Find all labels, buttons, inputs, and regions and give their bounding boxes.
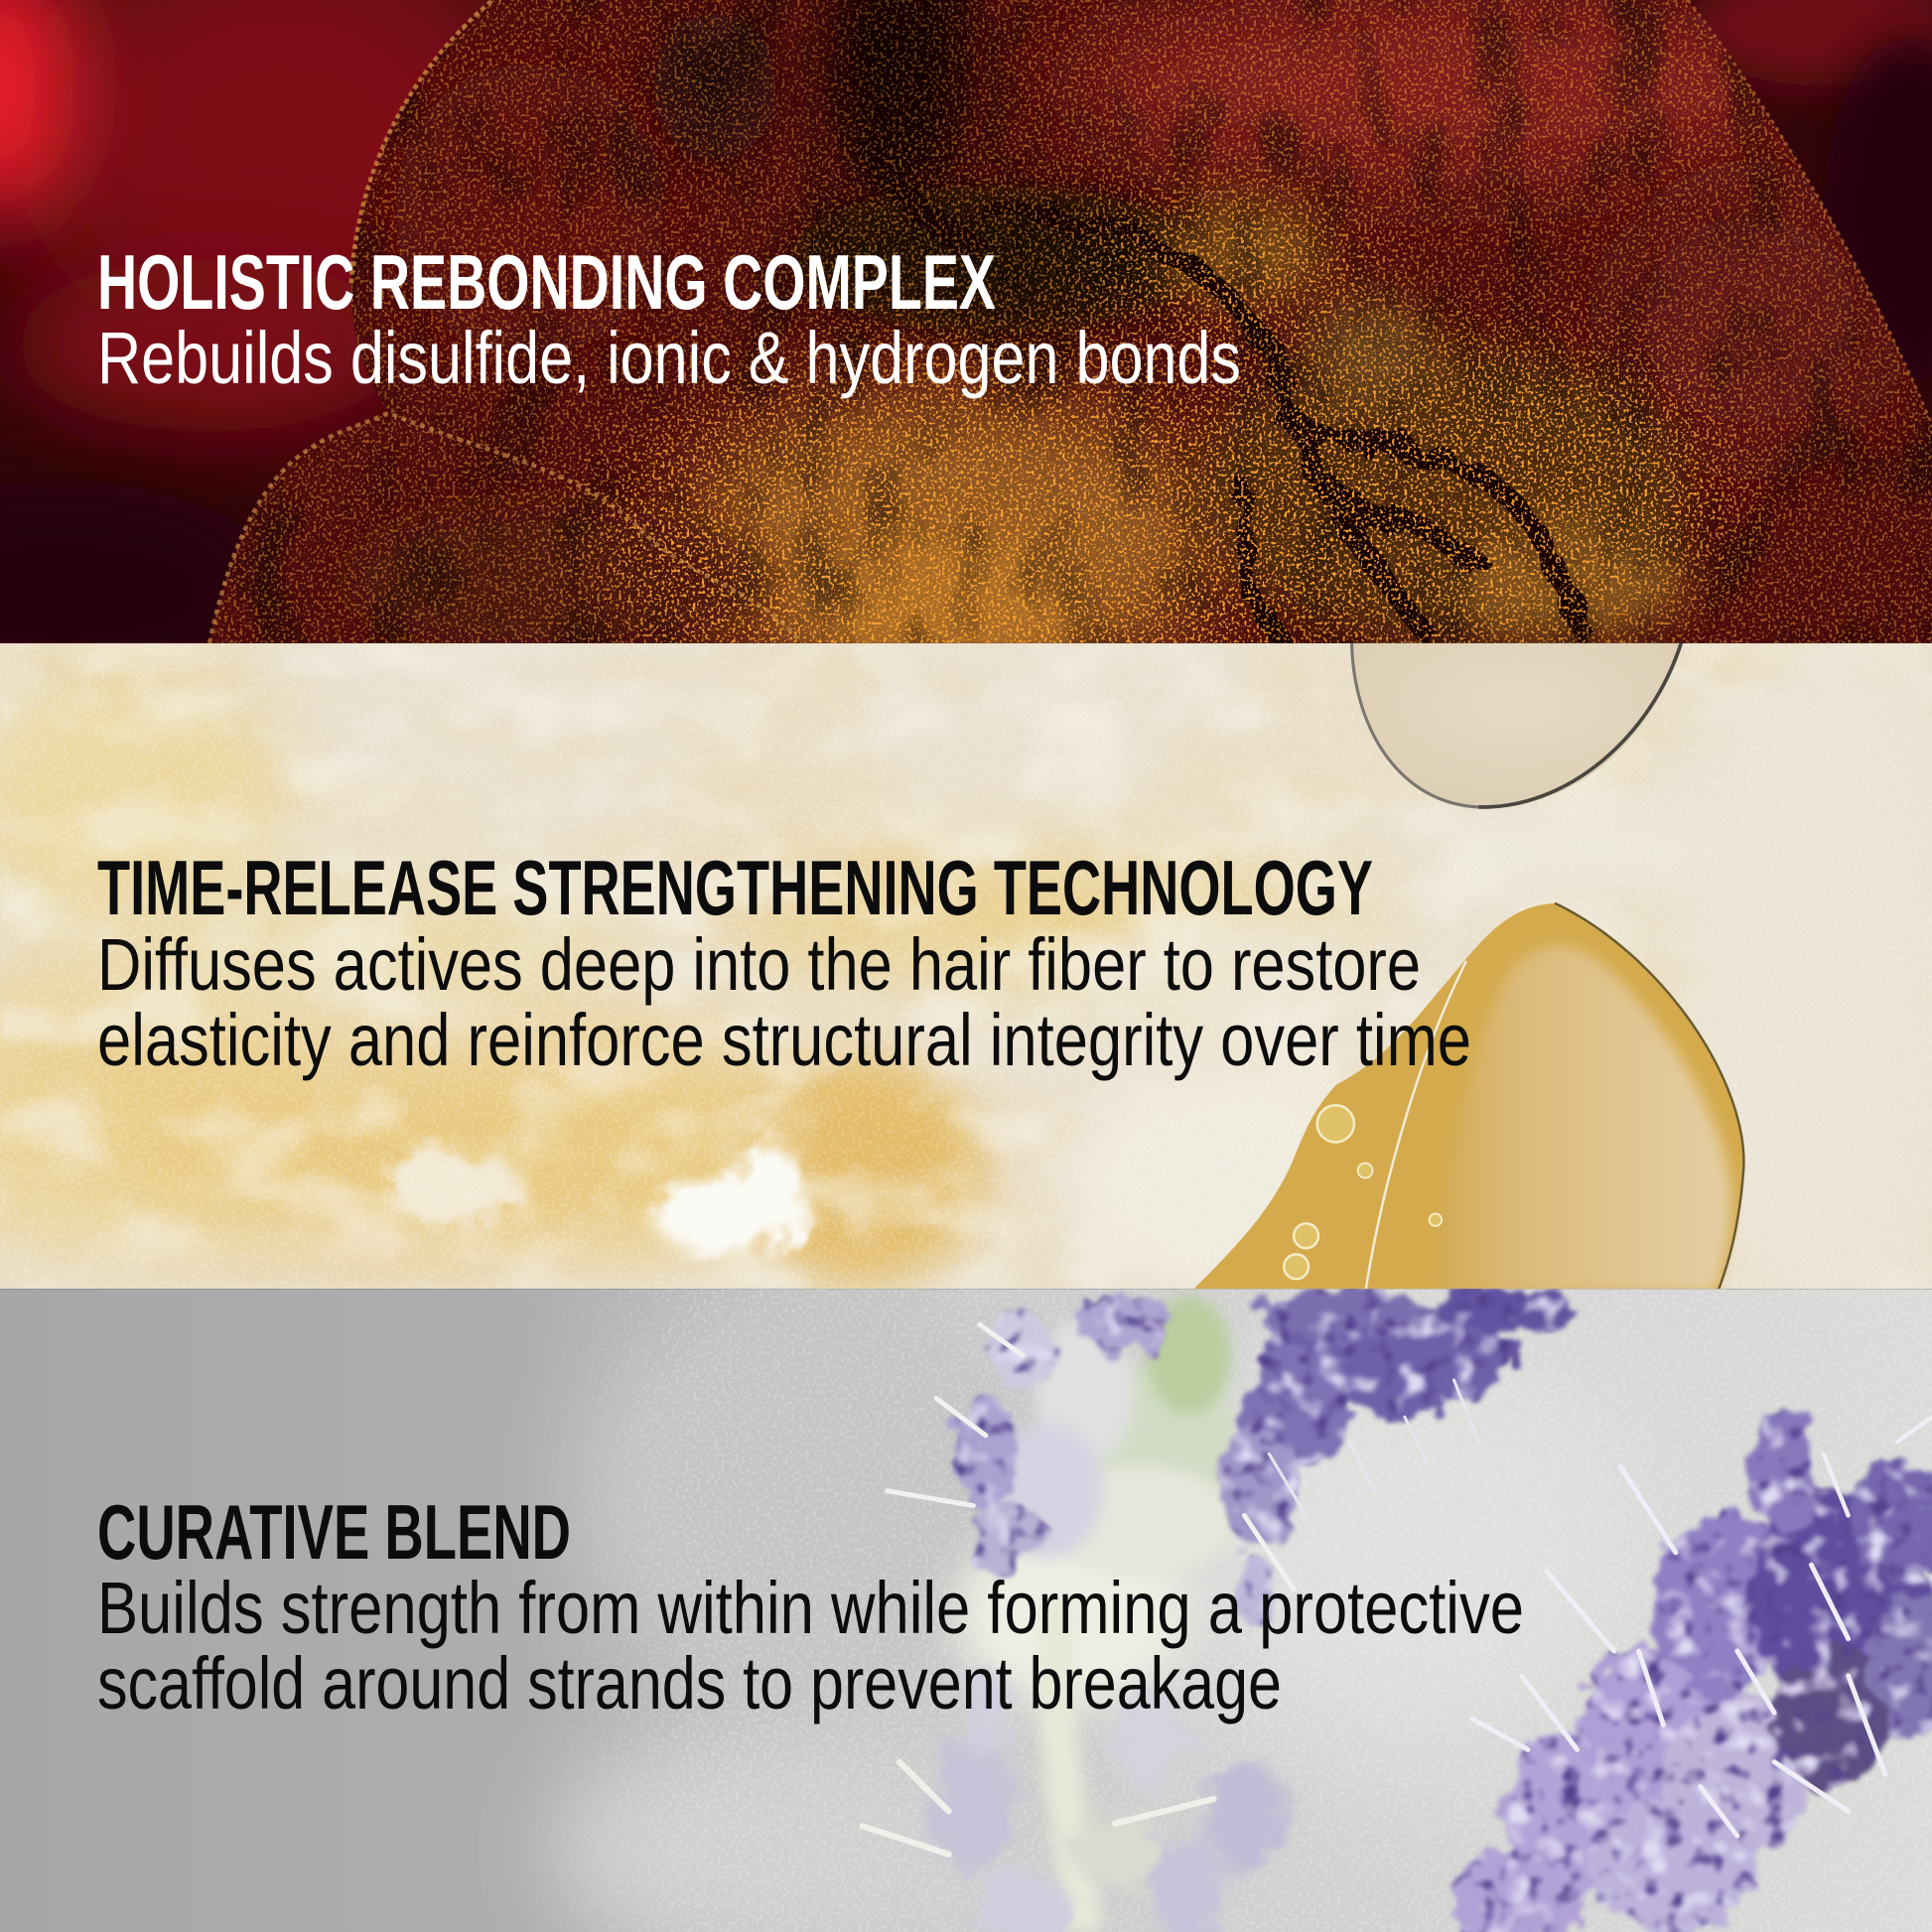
description [97, 923, 1471, 1081]
description: Builds strength from within while forming a protective [97, 1567, 1524, 1649]
description: Diffuses actives deep into the hair fiber to restore [97, 923, 1421, 1006]
heading: CURATIVE BLEND [97, 1488, 571, 1576]
text block: curative blend [97, 1488, 1524, 1725]
description: Rebuilds disulfide, ionic & hydrogen bonds [97, 317, 1241, 399]
heading: HOLISTIC REBONDING COMPLEX [97, 238, 996, 326]
upper oil droplet [1351, 634, 1682, 807]
lavender flower, lower right [1448, 1411, 1932, 1932]
pale lavender flower stem, lower centre [863, 1522, 1284, 1932]
heading: TIME-RELEASE STRENGTHENING TECHNOLOGY [97, 844, 1373, 931]
text block: holistic rebonding complex [97, 238, 1241, 399]
description: scaffold around strands to prevent breakage [97, 1642, 1282, 1725]
description [97, 1567, 1524, 1725]
lavender flower, upper centre [888, 1287, 1578, 1629]
description: elasticity and reinforce structural integrity over time [97, 999, 1471, 1081]
swirl body with gold shimmer [210, 0, 1932, 643]
panel: cream and honey marbled background [0, 634, 1932, 1318]
text block: time-release strengthening technology [97, 844, 1471, 1081]
panel: red and gold metallic swirl background [0, 0, 1932, 702]
lower oil droplet with bubbles [1189, 903, 1743, 1294]
white foam streak [388, 1147, 803, 1253]
panel: grey mist and lavender background [0, 1282, 1932, 1932]
